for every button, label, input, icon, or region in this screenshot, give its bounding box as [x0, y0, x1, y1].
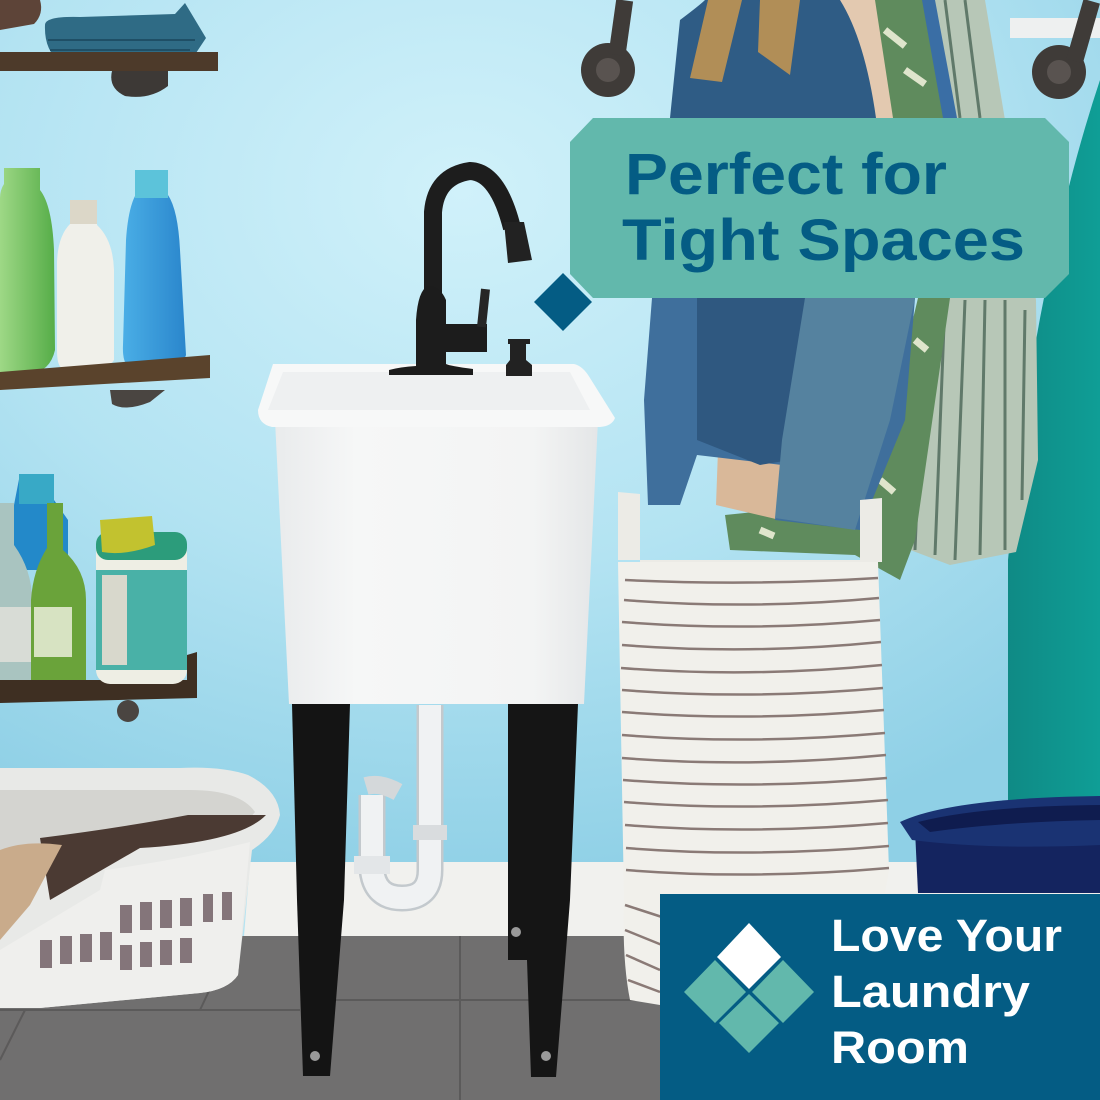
- heading callout: [570, 118, 1069, 298]
- wall background: [0, 0, 1100, 870]
- pipe brackets: [581, 0, 1100, 99]
- white laundry basket: [0, 768, 280, 1008]
- green floral shirt: [725, 0, 950, 580]
- floor: [0, 936, 1100, 1100]
- blue shirt: [905, 0, 957, 118]
- ironing board: [1008, 80, 1100, 800]
- beige shirt: [835, 0, 893, 118]
- brand name: Laundry: [831, 966, 1030, 1017]
- sink legs: [292, 704, 578, 1077]
- denim jacket: [670, 0, 876, 118]
- baseboard: [244, 862, 1100, 936]
- faucet: [389, 171, 532, 376]
- shelf lower left with cleaners: [0, 474, 197, 722]
- shelf top left with towels: [0, 0, 218, 97]
- drain pipe: [354, 705, 447, 898]
- blue detergent bottle: [123, 170, 186, 369]
- brand badge: [660, 894, 1100, 1100]
- sink tub: [258, 364, 615, 704]
- brand name: Room: [831, 1022, 969, 1073]
- heading callout: Tight Spaces: [622, 208, 1025, 273]
- callout pointer diamond: [534, 273, 592, 331]
- jacket collar: [690, 0, 800, 82]
- brand name: Love Your: [831, 910, 1062, 961]
- brand name: [831, 910, 1062, 1073]
- white bottle: [57, 200, 114, 368]
- blue bucket: [900, 796, 1100, 893]
- heading callout: Perfect for: [625, 142, 947, 207]
- icon: logo diamonds: [684, 923, 814, 1053]
- striped shirt: [905, 0, 1038, 565]
- striped hamper: [618, 492, 889, 1005]
- green detergent bottle: [0, 168, 55, 373]
- clothes on rack: [581, 0, 1100, 580]
- shelf middle left with bottles: [0, 168, 210, 408]
